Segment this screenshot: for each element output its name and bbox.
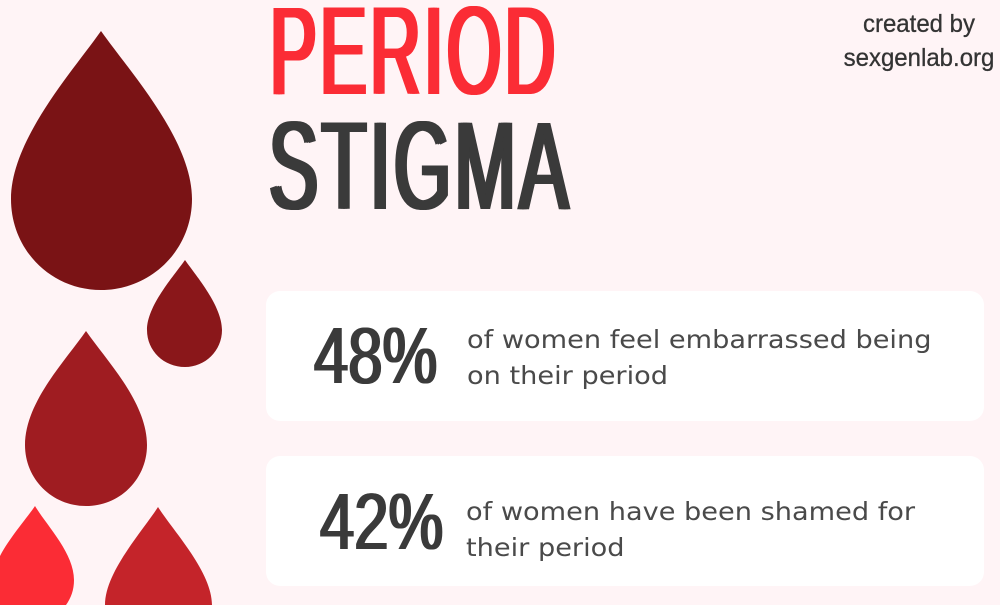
stat description: their period (466, 533, 625, 562)
stat description: on their period (467, 361, 668, 390)
icon: bottom left drop (0, 506, 74, 605)
credit: created by (863, 10, 975, 38)
stat description: of women have been shamed for (466, 497, 915, 526)
stat description: of women feel embarrassed being (467, 325, 931, 354)
credit: sexgenlab.org (844, 44, 994, 72)
stat number: 42% (320, 477, 443, 566)
stat description (467, 325, 931, 390)
panel: 42 percent stat (266, 456, 984, 586)
credit (844, 10, 994, 72)
icon: blood drops (0, 31, 222, 605)
stat description (466, 497, 916, 562)
icon: small drop (147, 260, 222, 367)
icon: medium drop (25, 331, 147, 506)
title: stigma: STIGMA (269, 97, 572, 236)
icon: bottom right drop (105, 507, 212, 605)
stat number: 48% (314, 311, 437, 400)
icon: large drop (11, 31, 192, 290)
panel: 48 percent stat (266, 291, 984, 421)
